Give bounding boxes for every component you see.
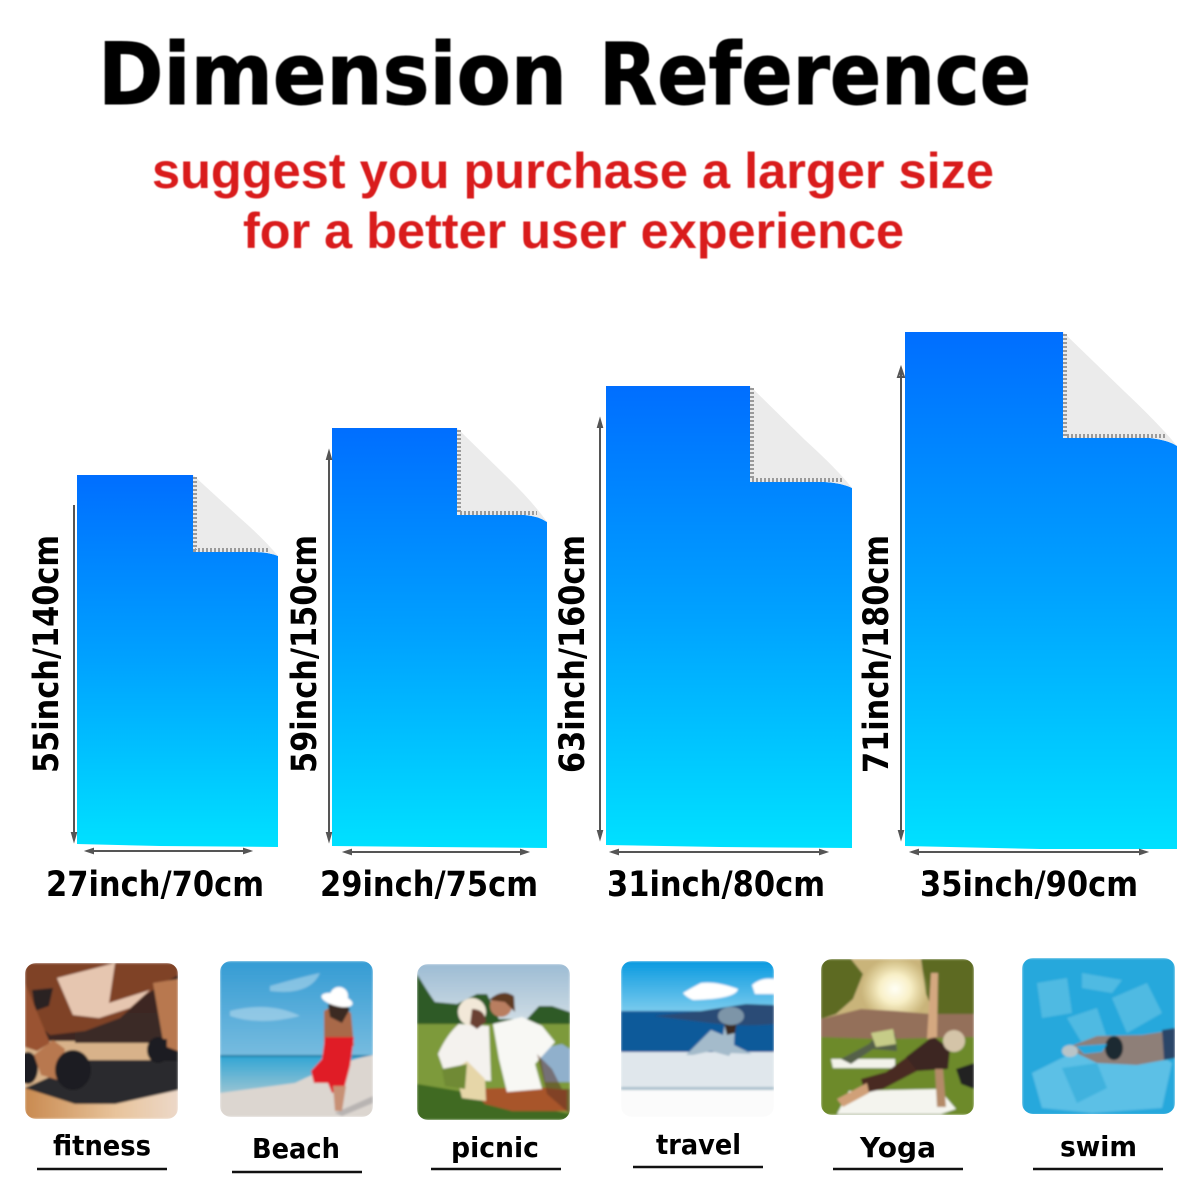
towel folded corner xyxy=(1063,332,1177,446)
width arrow xyxy=(612,850,826,854)
photo: yoga xyxy=(821,957,974,1115)
label: Yoga: Yoga xyxy=(859,1131,936,1164)
panel: beach xyxy=(220,961,373,1172)
label: swim: swim xyxy=(1060,1130,1137,1163)
label: Beach: Beach xyxy=(252,1132,340,1165)
photo: beach xyxy=(220,961,373,1117)
panel: towel size 3 xyxy=(553,386,852,905)
photo: swim xyxy=(1022,958,1175,1115)
subtitle: purchase advice: suggest you purchase a larger size xyxy=(152,143,994,199)
panel: travel xyxy=(621,961,774,1167)
subtitle: purchase advice xyxy=(152,143,994,259)
underline xyxy=(833,1168,963,1170)
towel folded corner xyxy=(750,386,852,488)
photo: picnic xyxy=(417,964,570,1120)
subtitle: purchase advice: for a better user experience xyxy=(243,203,904,259)
panel: towel size 1 xyxy=(27,475,278,905)
label: travel: travel xyxy=(656,1128,741,1161)
towel folded corner xyxy=(457,428,547,522)
height label: 59inch/150cm xyxy=(285,535,325,773)
panel: towel size 2 xyxy=(285,428,547,905)
photo: fitness xyxy=(18,963,178,1119)
height arrow xyxy=(598,420,602,838)
width arrow xyxy=(345,850,527,854)
panel: towel size 4 xyxy=(857,332,1177,905)
panel: swim xyxy=(1022,958,1175,1169)
underline xyxy=(633,1166,763,1168)
label: fitness: fitness xyxy=(53,1129,151,1162)
title: Reference xyxy=(599,25,1031,125)
title xyxy=(98,25,1031,125)
panel: fitness xyxy=(18,963,178,1169)
towel body xyxy=(905,332,1177,849)
width label: 27inch/70cm xyxy=(46,865,264,905)
underline xyxy=(1033,1168,1163,1170)
height arrow xyxy=(72,505,76,840)
width label: 29inch/75cm xyxy=(320,865,538,905)
width label: 31inch/80cm xyxy=(607,865,825,905)
height arrow xyxy=(898,368,904,838)
panel: yoga xyxy=(821,957,974,1169)
underline xyxy=(37,1168,167,1170)
towel body xyxy=(332,428,547,848)
height arrow xyxy=(327,452,331,840)
underline xyxy=(431,1168,561,1170)
height label: 55inch/140cm xyxy=(27,535,67,773)
photo: travel xyxy=(621,961,774,1092)
label: picnic: picnic xyxy=(451,1131,539,1164)
width label: 35inch/90cm xyxy=(920,865,1138,905)
underline xyxy=(232,1171,362,1173)
towel body xyxy=(77,475,278,847)
towel folded corner xyxy=(193,475,278,556)
width arrow xyxy=(87,849,250,853)
title: Dimension xyxy=(98,25,567,125)
panel: picnic xyxy=(417,964,570,1169)
towel body xyxy=(606,386,852,848)
height label: 71inch/180cm xyxy=(857,535,897,773)
width arrow xyxy=(912,850,1146,854)
height label: 63inch/160cm xyxy=(553,535,593,773)
